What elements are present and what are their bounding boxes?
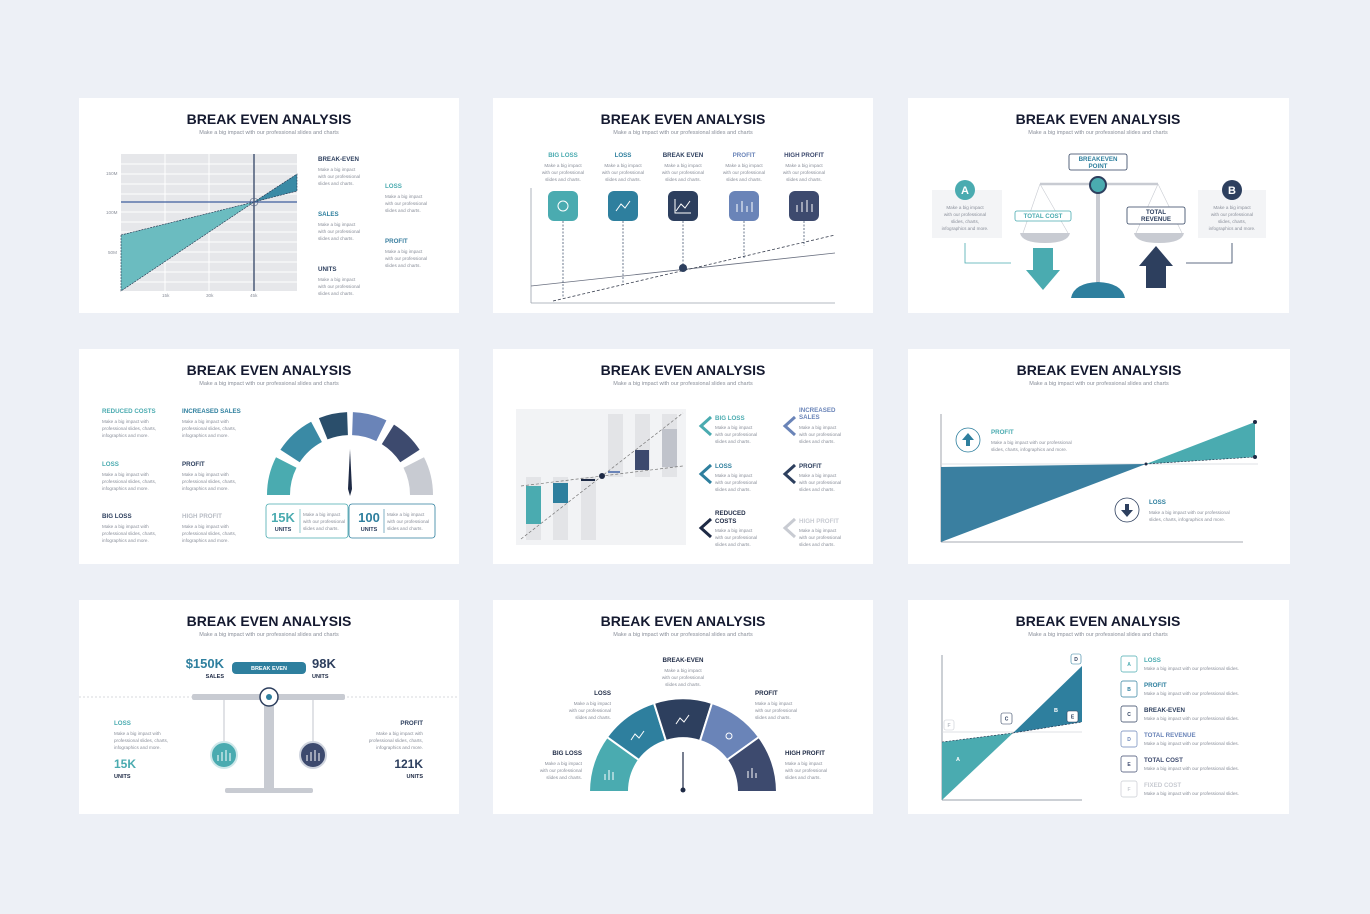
chart: break-even: 100M bbox=[106, 210, 118, 215]
lettered chart: C bbox=[1005, 716, 1009, 722]
chevron items: BIG LOSS bbox=[715, 415, 745, 422]
subtitle: Make a big impact with our professional slides and charts bbox=[1028, 632, 1168, 638]
stat: sales bbox=[186, 656, 225, 680]
legend list: TOTAL REVENUE bbox=[1144, 732, 1196, 739]
labels row: slides and charts. bbox=[665, 177, 701, 182]
text: profit: 121K bbox=[394, 757, 423, 771]
panel A bbox=[932, 180, 1011, 263]
text: big loss: Make a big impact bbox=[545, 761, 583, 766]
legend list: Make a big impact with our professional slides. bbox=[1144, 666, 1239, 671]
text: high profit: HIGH PROFIT bbox=[785, 750, 825, 757]
labels row: Make a big impact bbox=[604, 163, 642, 168]
chevron items: REDUCED bbox=[715, 510, 746, 517]
legend list: Make a big impact with our professional slides. bbox=[1144, 791, 1239, 796]
title: BREAK EVEN ANALYSIS bbox=[601, 111, 765, 127]
text: profit: Make a big impact bbox=[755, 701, 793, 706]
legend list: LOSS bbox=[1144, 657, 1161, 664]
labels row: Make a big impact bbox=[785, 163, 823, 168]
text: units: UNITS bbox=[318, 266, 337, 273]
title: BREAK EVEN ANALYSIS bbox=[187, 613, 351, 629]
chart: break-even: 150M bbox=[106, 171, 118, 176]
text grid: professional slides, charts, bbox=[182, 426, 236, 431]
labels row: BIG LOSS bbox=[548, 152, 578, 159]
text: break-even: BREAK-EVEN bbox=[663, 657, 704, 664]
legend list: C bbox=[1127, 712, 1131, 718]
scale bbox=[1020, 177, 1184, 298]
stat: units: 98K bbox=[312, 656, 336, 671]
labels row bbox=[542, 152, 825, 182]
stat box 15K: UNITS bbox=[275, 527, 292, 533]
text: profit bbox=[385, 238, 427, 268]
labels row: HIGH PROFIT bbox=[784, 152, 824, 159]
text: loss: LOSS bbox=[114, 720, 131, 727]
lettered chart bbox=[942, 654, 1082, 800]
labels row: slides and charts. bbox=[786, 177, 822, 182]
stat box 100 bbox=[349, 504, 435, 538]
chart: break-even: 30k bbox=[206, 293, 214, 298]
text: big loss: with our professional bbox=[540, 768, 582, 773]
loss note: LOSS bbox=[1149, 499, 1166, 506]
labels row: slides and charts. bbox=[605, 177, 641, 182]
text: sales: with our professional bbox=[318, 229, 360, 234]
legend list: E bbox=[1127, 762, 1131, 768]
labels row: with our professional bbox=[662, 170, 704, 175]
text: profit: slides and charts. bbox=[755, 715, 791, 720]
subtitle: Make a big impact with our professional slides and charts bbox=[613, 130, 753, 136]
labels row: with our professional bbox=[602, 170, 644, 175]
text: break-even: Make a big impact bbox=[318, 167, 356, 172]
text: units: Make a big impact bbox=[318, 277, 356, 282]
text: sales bbox=[318, 211, 360, 241]
legend list: BREAK-EVEN bbox=[1144, 707, 1185, 714]
labels row: with our professional bbox=[723, 170, 765, 175]
text: big loss bbox=[540, 750, 583, 780]
chevron items: Make a big impact bbox=[715, 473, 753, 478]
chevron items: slides and charts. bbox=[715, 542, 751, 547]
text grid: professional slides, charts, bbox=[182, 479, 236, 484]
lettered chart: D bbox=[1074, 657, 1078, 663]
label: total revenue: REVENUE bbox=[1141, 216, 1171, 223]
text: break-even: with our professional bbox=[662, 675, 704, 680]
stat: sales: SALES bbox=[206, 674, 224, 680]
slide 7: seesaw bbox=[79, 600, 459, 814]
text: profit: Make a big impact with bbox=[376, 731, 423, 736]
title: BREAK EVEN ANALYSIS bbox=[601, 613, 765, 629]
text: profit bbox=[755, 690, 797, 720]
text: profit: PROFIT bbox=[755, 690, 778, 697]
waterfall chart bbox=[516, 409, 686, 545]
labels row: Make a big impact bbox=[725, 163, 763, 168]
text: loss: LOSS bbox=[594, 690, 611, 697]
text: loss: with our professional bbox=[569, 708, 611, 713]
text: units bbox=[318, 266, 360, 296]
text grid: Make a big impact with bbox=[182, 524, 229, 529]
legend list: Make a big impact with our professional slides. bbox=[1144, 766, 1239, 771]
stat box 15K: with our professional bbox=[303, 519, 345, 524]
break even pill bbox=[232, 662, 306, 674]
legend list: Make a big impact with our professional slides. bbox=[1144, 691, 1239, 696]
labels row: LOSS bbox=[615, 152, 631, 159]
chevron items: Make a big impact bbox=[799, 528, 837, 533]
chevron items: slides and charts. bbox=[715, 439, 751, 444]
text: profit: Make a big impact bbox=[385, 249, 423, 254]
panel B: Make a big impact bbox=[1213, 205, 1251, 210]
text grid: INCREASED SALES bbox=[182, 408, 241, 415]
chevron items: slides and charts. bbox=[799, 439, 835, 444]
text: loss: Make a big impact bbox=[574, 701, 612, 706]
text: high profit: Make a big impact bbox=[785, 761, 823, 766]
text: break-even bbox=[318, 156, 360, 186]
chevron items: Make a big impact bbox=[799, 473, 837, 478]
labels row: Make a big impact bbox=[664, 163, 702, 168]
subtitle: Make a big impact with our professional slides and charts bbox=[1029, 381, 1169, 387]
subtitle: Make a big impact with our professional slides and charts bbox=[199, 632, 339, 638]
text grid: infographics and more. bbox=[182, 433, 229, 438]
text grid: professional slides, charts, bbox=[102, 479, 156, 484]
text grid: LOSS bbox=[102, 461, 119, 468]
text grid: infographics and more. bbox=[102, 433, 149, 438]
text: loss: professional slides, charts, bbox=[114, 738, 168, 743]
text: break-even: Make a big impact bbox=[664, 668, 702, 673]
chart: break-even: 50M bbox=[108, 250, 117, 255]
text grid: infographics and more. bbox=[102, 486, 149, 491]
subtitle: Make a big impact with our professional slides and charts bbox=[1028, 130, 1168, 136]
chevron items: Make a big impact bbox=[715, 528, 753, 533]
text: break-even bbox=[662, 657, 704, 687]
break even pill: BREAK EVEN bbox=[251, 666, 287, 672]
legend list: Make a big impact with our professional slides. bbox=[1144, 741, 1239, 746]
chevron items: HIGH PROFIT bbox=[799, 518, 839, 525]
semicircle gauge bbox=[589, 698, 777, 792]
chevron items: with our professional bbox=[715, 480, 757, 485]
slide 5: waterfall with chevrons bbox=[493, 349, 873, 564]
title: BREAK EVEN ANALYSIS bbox=[1016, 111, 1180, 127]
chevron items: Make a big impact bbox=[799, 425, 837, 430]
text: loss: 15K bbox=[114, 757, 136, 771]
text: profit: UNITS bbox=[406, 774, 423, 780]
text: loss bbox=[385, 183, 427, 213]
labels row: with our professional bbox=[542, 170, 584, 175]
labels row: BREAK EVEN bbox=[663, 152, 704, 159]
loss note: slides, charts, infographics and more. bbox=[1149, 517, 1225, 522]
text: high profit: slides and charts. bbox=[785, 775, 821, 780]
chevron items: Make a big impact bbox=[715, 425, 753, 430]
text: loss: infographics and more. bbox=[114, 745, 161, 750]
text grid: Make a big impact with bbox=[102, 472, 149, 477]
panel A: infographics and more. bbox=[942, 226, 988, 231]
legend list: PROFIT bbox=[1144, 682, 1167, 689]
text: high profit: with our professional bbox=[785, 768, 827, 773]
subtitle: Make a big impact with our professional slides and charts bbox=[199, 381, 339, 387]
text: loss: Make a big impact bbox=[385, 194, 423, 199]
title: BREAK EVEN ANALYSIS bbox=[1017, 362, 1181, 378]
slide 4: gauge bbox=[79, 349, 459, 564]
text: profit: professional slides, charts, bbox=[369, 738, 423, 743]
slide 1: break-even line chart bbox=[79, 98, 459, 313]
labels row: PROFIT bbox=[733, 152, 756, 159]
profit note: PROFIT bbox=[991, 429, 1014, 436]
text: big loss: slides and charts. bbox=[546, 775, 582, 780]
text: sales: slides and charts. bbox=[318, 236, 354, 241]
legend list: F bbox=[1127, 787, 1131, 793]
label: breakeven point: POINT bbox=[1089, 163, 1108, 170]
panel B: infographics and more. bbox=[1209, 226, 1255, 231]
lettered chart: E bbox=[1071, 714, 1075, 720]
legend list: Make a big impact with our professional slides. bbox=[1144, 716, 1239, 721]
slide 6: profit/loss wedge bbox=[908, 349, 1290, 564]
stat: sales: $150K bbox=[186, 656, 225, 671]
text grid: infographics and more. bbox=[182, 538, 229, 543]
chevron items: INCREASED bbox=[799, 407, 836, 414]
legend list: TOTAL COST bbox=[1144, 757, 1183, 764]
chevron items bbox=[701, 407, 841, 547]
legend list: D bbox=[1127, 737, 1131, 743]
chevron items: slides and charts. bbox=[799, 542, 835, 547]
chevron items: COSTS bbox=[715, 518, 736, 525]
chevron items: with our professional bbox=[799, 535, 841, 540]
text: profit: PROFIT bbox=[400, 720, 423, 727]
stat box 100: UNITS bbox=[361, 527, 378, 533]
text grid: Make a big impact with bbox=[102, 419, 149, 424]
chart: break-even bbox=[106, 154, 297, 298]
profit note bbox=[956, 428, 1072, 452]
text grid: professional slides, charts, bbox=[182, 531, 236, 536]
text: loss: LOSS bbox=[385, 183, 402, 190]
legend list: FIXED COST bbox=[1144, 782, 1181, 789]
text: sales: Make a big impact bbox=[318, 222, 356, 227]
slide 8: semicircle gauge bbox=[493, 600, 873, 814]
text grid: professional slides, charts, bbox=[102, 531, 156, 536]
labels row: slides and charts. bbox=[726, 177, 762, 182]
wedge chart bbox=[941, 414, 1258, 542]
title: BREAK EVEN ANALYSIS bbox=[601, 362, 765, 378]
text grid: professional slides, charts, bbox=[102, 426, 156, 431]
chevron items: PROFIT bbox=[799, 463, 822, 470]
text: loss: UNITS bbox=[114, 774, 131, 780]
label: total revenue: TOTAL bbox=[1146, 209, 1166, 216]
loss note: Make a big impact with our professional bbox=[1149, 510, 1230, 515]
text: loss: slides and charts. bbox=[575, 715, 611, 720]
text grid bbox=[102, 408, 241, 543]
text: high profit bbox=[785, 750, 827, 780]
slide 3: balance scale bbox=[908, 98, 1289, 313]
text: sales: SALES bbox=[318, 211, 339, 218]
text grid: Make a big impact with bbox=[102, 524, 149, 529]
text: units: with our professional bbox=[318, 284, 360, 289]
slide 2: icon markers on lines bbox=[493, 98, 873, 313]
chevron items: slides and charts. bbox=[799, 487, 835, 492]
panel A: A bbox=[961, 185, 969, 197]
stat box 100: Make a big impact bbox=[387, 512, 425, 517]
legend list bbox=[1121, 656, 1239, 797]
legend list: B bbox=[1127, 687, 1131, 693]
labels row: with our professional bbox=[783, 170, 825, 175]
stat box 15K bbox=[266, 504, 348, 538]
chevron items: with our professional bbox=[799, 432, 841, 437]
text: loss: with our professional bbox=[385, 201, 427, 206]
panel B: slides, charts, bbox=[1218, 219, 1246, 224]
stat box 15K: 15K bbox=[271, 510, 296, 525]
text: profit: with our professional bbox=[755, 708, 797, 713]
text: units: slides and charts. bbox=[318, 291, 354, 296]
lettered chart: B bbox=[1054, 708, 1058, 714]
text: break-even: with our professional bbox=[318, 174, 360, 179]
stat box 100: with our professional bbox=[387, 519, 429, 524]
label: breakeven point bbox=[1069, 154, 1127, 170]
panel B: with our professional bbox=[1211, 212, 1253, 217]
chevron items: SALES bbox=[799, 414, 820, 421]
text grid: infographics and more. bbox=[182, 486, 229, 491]
text: loss: Make a big impact with bbox=[114, 731, 161, 736]
text: break-even: slides and charts. bbox=[318, 181, 354, 186]
chevron items: with our professional bbox=[715, 535, 757, 540]
stat box 100: 100 bbox=[358, 510, 380, 525]
chevron items: LOSS bbox=[715, 463, 732, 470]
profit note: Make a big impact with our professional bbox=[991, 440, 1072, 445]
text grid: BIG LOSS bbox=[102, 513, 132, 520]
panel A: Make a big impact bbox=[946, 205, 984, 210]
text: profit: slides and charts. bbox=[385, 263, 421, 268]
label: total cost bbox=[1015, 211, 1071, 221]
text grid: Make a big impact with bbox=[182, 419, 229, 424]
stat: units bbox=[312, 656, 336, 680]
labels row: slides and charts. bbox=[545, 177, 581, 182]
text: loss bbox=[569, 690, 612, 720]
stat box 15K: slides and charts. bbox=[303, 526, 339, 531]
subtitle: Make a big impact with our professional slides and charts bbox=[613, 381, 753, 387]
text: big loss: BIG LOSS bbox=[552, 750, 582, 757]
slide 9: lettered chart bbox=[908, 600, 1289, 814]
seesaw graphic bbox=[79, 688, 459, 793]
lettered chart: A bbox=[956, 757, 960, 763]
lettered chart: F bbox=[947, 723, 951, 729]
text grid: infographics and more. bbox=[102, 538, 149, 543]
title: BREAK EVEN ANALYSIS bbox=[1016, 613, 1180, 629]
chevron items: slides and charts. bbox=[715, 487, 751, 492]
title: BREAK EVEN ANALYSIS bbox=[187, 111, 351, 127]
panel A: slides, charts, bbox=[951, 219, 979, 224]
text: profit bbox=[369, 720, 423, 780]
text: profit: infographics and more. bbox=[376, 745, 423, 750]
text: profit: PROFIT bbox=[385, 238, 408, 245]
title: BREAK EVEN ANALYSIS bbox=[187, 362, 351, 378]
text: loss bbox=[114, 720, 168, 780]
labels row: Make a big impact bbox=[544, 163, 582, 168]
chart: lines with markers bbox=[531, 188, 835, 303]
text: break-even: BREAK-EVEN bbox=[318, 156, 359, 163]
text: profit: with our professional bbox=[385, 256, 427, 261]
panel B: B bbox=[1228, 185, 1236, 197]
text: break-even: slides and charts. bbox=[665, 682, 701, 687]
text: loss: slides and charts. bbox=[385, 208, 421, 213]
subtitle: Make a big impact with our professional slides and charts bbox=[613, 632, 753, 638]
profit note: slides, charts, infographics and more. bbox=[991, 447, 1067, 452]
stat: units: UNITS bbox=[312, 674, 329, 680]
legend list: A bbox=[1127, 662, 1131, 668]
chevron items: with our professional bbox=[799, 480, 841, 485]
chart: break-even: 45k bbox=[250, 293, 258, 298]
subtitle: Make a big impact with our professional slides and charts bbox=[199, 130, 339, 136]
chevron items: with our professional bbox=[715, 432, 757, 437]
chart: break-even: 15k bbox=[162, 293, 170, 298]
label: total cost: TOTAL COST bbox=[1024, 213, 1063, 220]
stat box 15K: Make a big impact bbox=[303, 512, 341, 517]
panel A: with our professional bbox=[944, 212, 986, 217]
text grid: HIGH PROFIT bbox=[182, 513, 222, 520]
label: total revenue bbox=[1127, 207, 1185, 224]
label: breakeven point: BREAKEVEN bbox=[1079, 156, 1118, 163]
text grid: Make a big impact with bbox=[182, 472, 229, 477]
text grid: PROFIT bbox=[182, 461, 205, 468]
loss note bbox=[1115, 498, 1230, 522]
gauge chart bbox=[267, 412, 433, 496]
panel B bbox=[1186, 180, 1266, 263]
stat box 100: slides and charts. bbox=[387, 526, 423, 531]
text grid: REDUCED COSTS bbox=[102, 408, 156, 415]
